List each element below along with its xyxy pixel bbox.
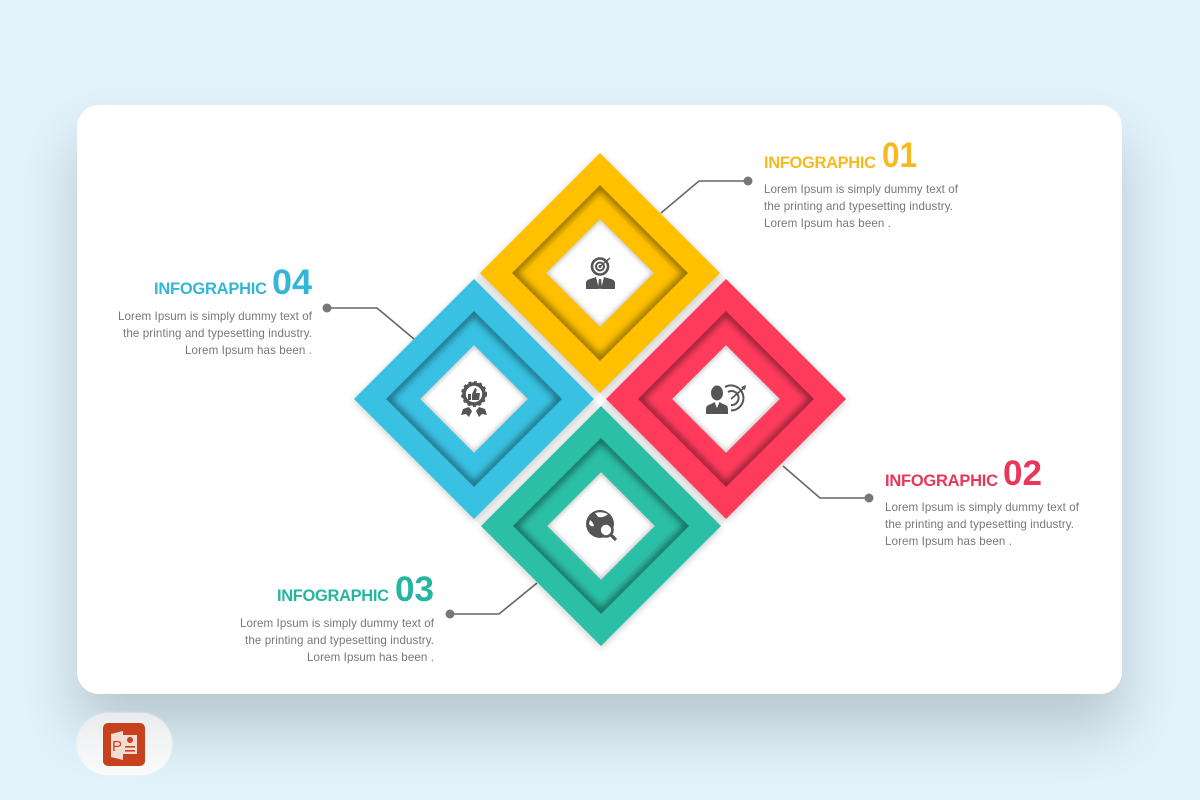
text block: infographic 03: Lorem Ipsum is simply dummy text of [240, 617, 435, 630]
text block: infographic 03: 03 [395, 570, 434, 609]
icon: PowerPoint logo [103, 723, 145, 766]
connector: infographic 04 [322, 304, 414, 339]
text block: infographic 02: the printing and typesetting industry. [885, 518, 1074, 531]
text block: infographic 03: Lorem Ipsum has been . [307, 651, 434, 664]
text block: infographic 03 [240, 570, 435, 664]
text block: infographic 02: INFOGRAPHIC [885, 472, 998, 490]
text block: infographic 04: Lorem Ipsum is simply dummy text of [118, 310, 313, 323]
connector: infographic 01 [661, 176, 752, 213]
connector: infographic 02 [783, 466, 874, 502]
icon: globe with magnifier [586, 510, 616, 540]
text block: infographic 01: Lorem Ipsum is simply dummy text of [764, 183, 959, 196]
text block: infographic 02: Lorem Ipsum has been . [885, 535, 1012, 548]
icon: businessman with target [586, 258, 615, 289]
icon: award badge with thumb up [461, 382, 487, 417]
connector: infographic 03 [446, 583, 537, 618]
PowerPoint badge [77, 713, 172, 775]
text block: infographic 04: INFOGRAPHIC [154, 280, 267, 298]
diamond: green [481, 406, 721, 648]
text block: infographic 01: the printing and typesetting industry. [764, 200, 953, 213]
text block: infographic 01: 01 [882, 136, 917, 175]
diamond: red [606, 279, 846, 521]
text block: infographic 04 [118, 263, 313, 357]
text block: infographic 01: Lorem Ipsum has been . [764, 217, 891, 230]
text block: infographic 03: the printing and typesetting industry. [245, 634, 434, 647]
text block: infographic 03: INFOGRAPHIC [277, 587, 389, 605]
text block: infographic 02: 02 [1003, 454, 1042, 493]
diamond: yellow [480, 153, 720, 395]
text block: infographic 04: 04 [272, 263, 313, 302]
text block: infographic 02 [885, 454, 1080, 548]
icon: PowerPoint logo: P [112, 738, 122, 755]
text block: infographic 04: Lorem Ipsum has been . [185, 344, 312, 357]
icon: person with target [706, 385, 746, 414]
text block: infographic 01 [764, 136, 959, 230]
text block: infographic 02: Lorem Ipsum is simply dummy text of [885, 501, 1080, 514]
text block: infographic 01: INFOGRAPHIC [764, 154, 876, 172]
diamond: blue [354, 279, 594, 521]
text block: infographic 04: the printing and typesetting industry. [123, 327, 312, 340]
white card panel [77, 105, 1122, 694]
